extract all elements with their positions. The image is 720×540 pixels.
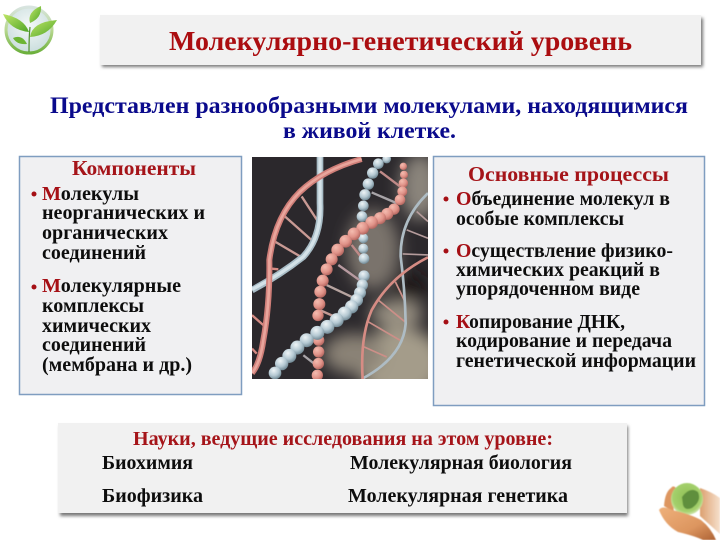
heading: main processes: Основные процессы xyxy=(468,162,669,186)
blue beads lower xyxy=(269,287,366,379)
list: main processes: Объединение молекул в xyxy=(456,188,670,210)
list: components: Молекулы xyxy=(42,183,139,205)
blue beads upper xyxy=(357,155,391,291)
list: main processes xyxy=(444,188,696,372)
list: components: химических xyxy=(42,315,151,337)
list: main processes: химических реакций в xyxy=(456,259,660,281)
subtitle: Представлен разнообразными молекулами, находящимися xyxy=(50,93,688,118)
list: components: неорганических и xyxy=(42,202,205,224)
list: main processes: Копирование ДНК, xyxy=(456,311,625,333)
left helix xyxy=(252,157,362,373)
subtitle: в живой клетке. xyxy=(283,118,456,143)
subtitle xyxy=(50,93,688,143)
list: sciences: Биохимия xyxy=(102,452,193,474)
panel: sciences xyxy=(58,423,628,516)
list: components: органических xyxy=(42,222,168,244)
list: main processes: особые комплексы xyxy=(456,208,624,230)
list: components: комплексы xyxy=(42,295,144,317)
list: components: соединений xyxy=(42,242,146,264)
list: components xyxy=(32,183,205,376)
panel: title xyxy=(100,15,703,67)
list: components: соединений xyxy=(42,334,146,356)
list: sciences: Биофизика xyxy=(102,485,203,507)
list: components: Молекулярные xyxy=(42,275,181,297)
list: sciences: Молекулярная генетика xyxy=(348,485,568,507)
list: sciences: Молекулярная биология xyxy=(350,452,572,474)
panel: components xyxy=(20,156,242,394)
icon: hands holding globe xyxy=(659,483,720,540)
list: components: (мембрана и др.) xyxy=(42,354,192,376)
list: main processes: упорядоченном виде xyxy=(456,278,640,300)
heading: components: Компоненты xyxy=(72,156,196,180)
list: main processes: кодирование и передача xyxy=(456,330,672,352)
heading: sciences: Науки, ведущие исследования на этом уровне: xyxy=(133,428,553,450)
pink beads xyxy=(312,163,408,381)
title: Молекулярно-генетический уровень xyxy=(169,26,632,56)
list: sciences xyxy=(102,452,572,507)
right helix xyxy=(362,193,428,379)
list: main processes: Осуществление физико- xyxy=(456,240,673,262)
rungs of central helix xyxy=(303,171,400,367)
list: main processes: генетической информации xyxy=(456,350,696,372)
icon: green plant logo xyxy=(3,6,57,54)
image: DNA helices xyxy=(252,157,428,379)
panel: main processes xyxy=(434,156,704,406)
